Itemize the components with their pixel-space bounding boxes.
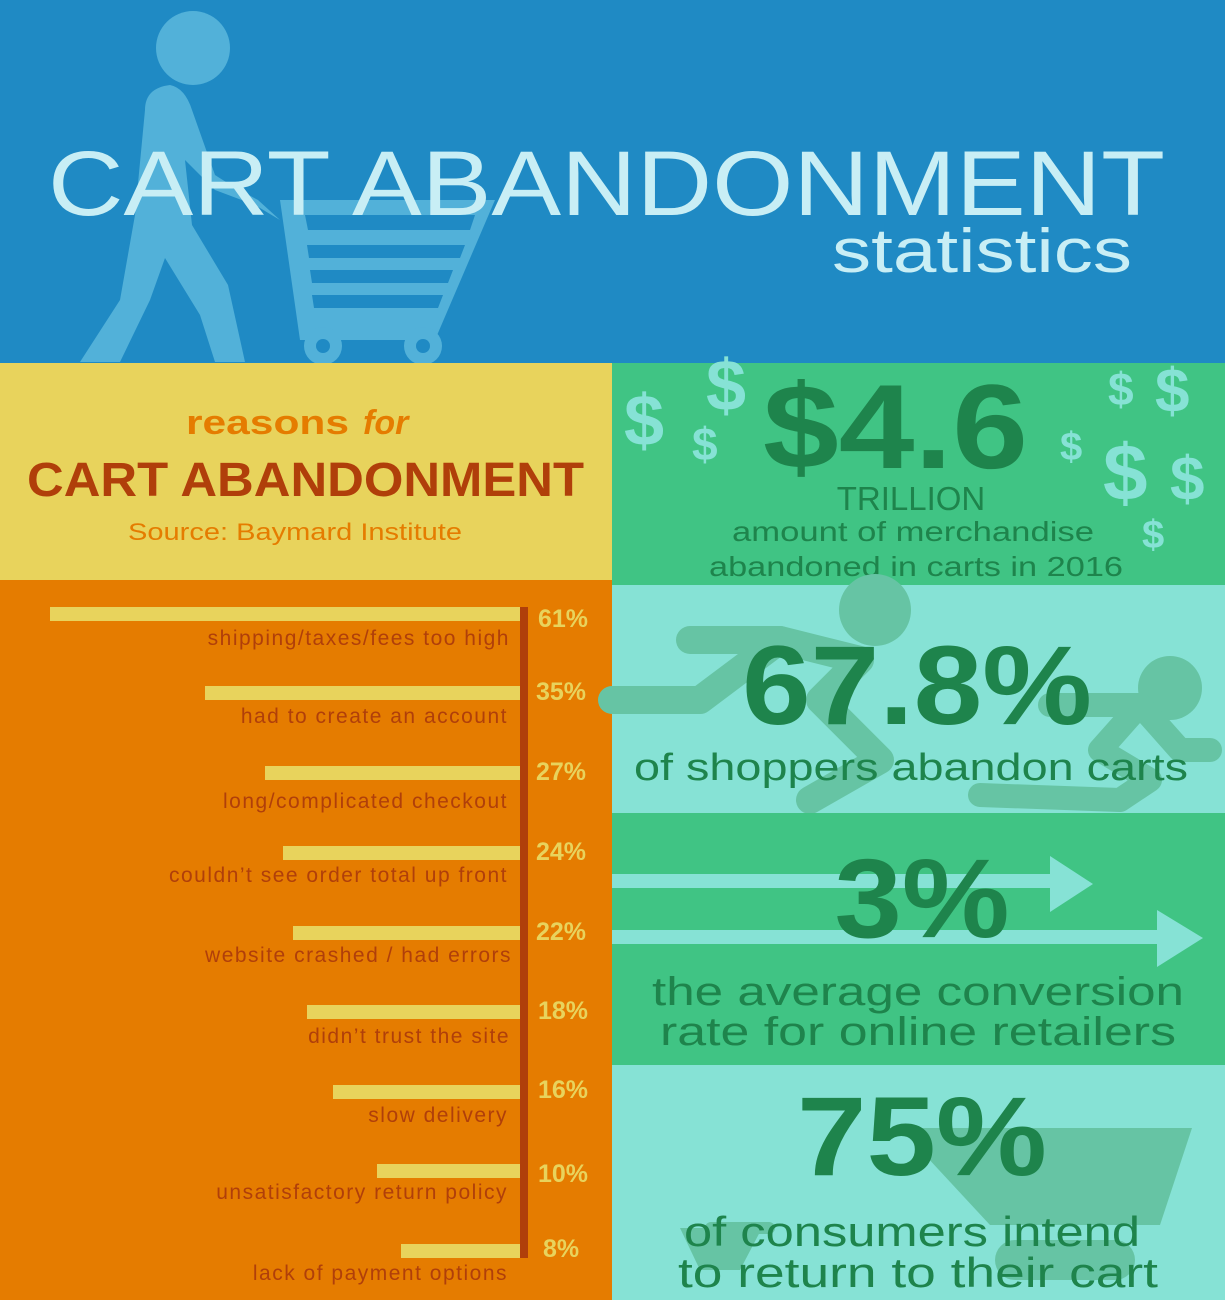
panel: reasons heading: for (363, 404, 410, 442)
panel: 3% conversion: 3% (834, 836, 1010, 961)
icon: dollar signs: $ (1108, 363, 1134, 415)
panel: reasons bar chart: unsatisfactory return policy (216, 1181, 508, 1204)
panel: reasons bar chart: website crashed / had errors (204, 944, 512, 967)
icon: dollar signs: $ (624, 381, 664, 461)
panel: 67.8% shoppers: of shoppers abandon carts (634, 747, 1188, 789)
panel: reasons bar chart: shipping/taxes/fees too high (208, 627, 510, 650)
panel: reasons bar chart (0, 580, 612, 1300)
panel: reasons bar chart: 10% (538, 1160, 588, 1188)
panel: 75% return: of consumers intend (684, 1208, 1140, 1255)
panel: reasons bar chart: 22% (536, 918, 586, 946)
panel: reasons bar chart: 16% (538, 1076, 588, 1104)
subtitle: statistics (832, 217, 1132, 286)
panel: reasons bar chart: had to create an account (241, 705, 508, 728)
panel: reasons heading: Source: Baymard Institute (128, 519, 462, 546)
panel: 67.8% shoppers (612, 574, 1225, 813)
panel: reasons bar chart: 24% (536, 838, 586, 866)
icon: dollar signs: $ (1170, 445, 1204, 514)
heading text: reasons (186, 404, 349, 442)
panel: $4.6 trillion: TRILLION (837, 480, 985, 517)
icon: running figures (612, 574, 1210, 800)
panel: 3% conversion: rate for online retailers (660, 1010, 1176, 1054)
icon: dollar signs: $ (1142, 513, 1164, 557)
panel: reasons bar chart: 18% (538, 997, 588, 1025)
panel: $4.6 trillion (612, 346, 1225, 585)
panel: reasons heading (0, 363, 612, 580)
panel: reasons bar chart: didn’t trust the site (308, 1025, 510, 1048)
panel: reasons bar chart: 8% (543, 1235, 579, 1263)
icon: dollar signs (624, 346, 1204, 557)
header panel (0, 0, 1225, 365)
icon: dollar signs: $ (1103, 428, 1148, 517)
icon: carts (680, 1128, 1192, 1280)
icon: dollar signs: $ (1060, 425, 1082, 469)
panel: reasons bar chart: 27% (536, 758, 586, 786)
panel: $4.6 trillion: $4.6 (763, 360, 1028, 494)
panel: 75% return: 75% (797, 1074, 1047, 1199)
panel: $4.6 trillion: abandoned in carts in 2016 (709, 551, 1123, 582)
panel: reasons bar chart: 61% (538, 605, 588, 633)
icon: dollar signs: $ (692, 418, 718, 470)
icon: arrows (612, 856, 1203, 967)
icon: dollar signs: $ (1155, 357, 1189, 426)
panel: 67.8% shoppers: 67.8% (742, 623, 1092, 748)
panel: 75% return: to return to their cart (678, 1249, 1158, 1296)
panel: reasons bar chart: slow delivery (368, 1104, 508, 1127)
panel: reasons bar chart: lack of payment options (253, 1262, 508, 1285)
panel: 3% conversion: the average conversion (652, 970, 1184, 1014)
panel: reasons bar chart: long/complicated checkout (223, 790, 508, 813)
panel: 3% conversion (612, 813, 1225, 1065)
icon: walking person with cart (80, 11, 495, 365)
panel: reasons bar chart: 35% (536, 678, 586, 706)
title: CART ABANDONMENT (48, 133, 1165, 235)
panel: 75% return (612, 1065, 1225, 1300)
panel: $4.6 trillion: amount of merchandise (732, 516, 1094, 547)
icon: dollar signs: $ (706, 346, 746, 426)
panel: reasons bar chart: couldn’t see order total up front (169, 864, 508, 887)
panel: reasons heading: CART ABANDONMENT (27, 454, 584, 507)
